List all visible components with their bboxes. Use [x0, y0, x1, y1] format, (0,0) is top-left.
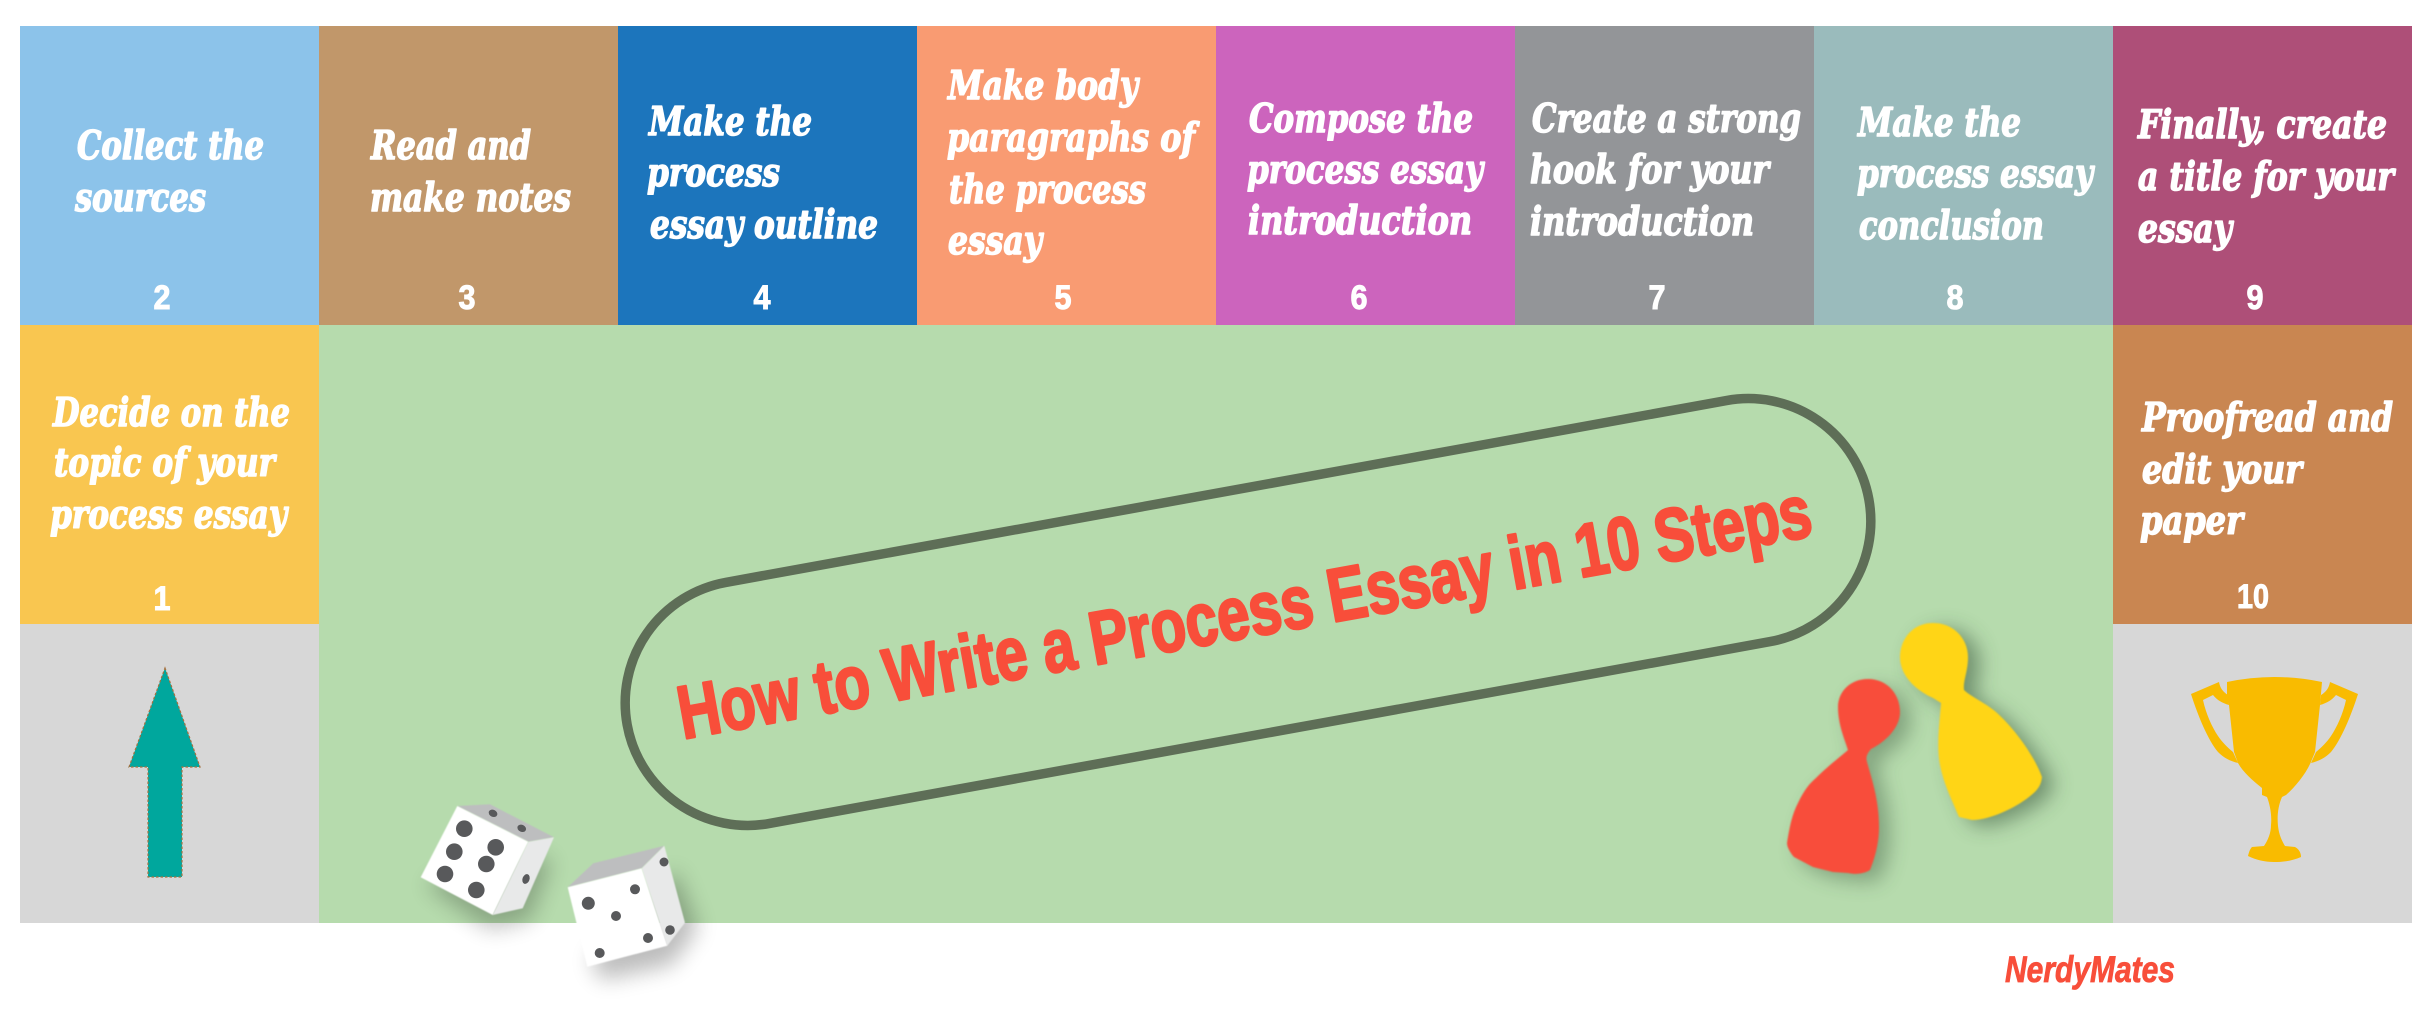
text: step 8: [1856, 100, 2095, 249]
text: step 6: introduction: [1248, 198, 1472, 244]
panel: step 8: [1814, 26, 2113, 325]
text: step 3: make notes: [370, 175, 571, 221]
panel: step 2: [20, 26, 319, 325]
text: step 2: sources: [74, 175, 206, 221]
number 6: 6: [1350, 279, 1368, 317]
title pill: [605, 379, 1891, 845]
text: step 8: Make the: [1856, 100, 2021, 146]
icon: red game pawn: [1787, 679, 1911, 882]
text: step 10: edit your: [2142, 447, 2304, 493]
text: step 4: essay outline: [650, 202, 878, 248]
number 3: 3: [458, 279, 476, 317]
panel: step 10: [2113, 325, 2412, 624]
number 10: 10: [2237, 578, 2269, 616]
panel: step 6: [1216, 26, 1515, 325]
text: step 10: [2140, 395, 2393, 544]
panel: green board centre: [319, 325, 2113, 923]
text: step 4: [647, 99, 878, 248]
text: step 2: [74, 123, 264, 221]
text: step 5: Make body: [946, 63, 1140, 109]
text: step 7: Create a strong: [1532, 96, 1801, 142]
text: step 5: the process: [949, 167, 1146, 213]
text: step 5: paragraphs of: [947, 115, 1200, 161]
text: step 4: process: [647, 150, 780, 196]
text: step 8: process essay: [1857, 151, 2095, 197]
text: step 6: [1247, 96, 1485, 244]
number 8: 8: [1946, 279, 1964, 317]
text: step 6: Compose the: [1249, 96, 1473, 142]
text: step 3: Read and: [370, 123, 531, 169]
text: step 4: Make the: [647, 99, 812, 145]
panel: start square with arrow: [20, 624, 319, 923]
text: step 1: [50, 390, 290, 538]
number 1: 1: [154, 580, 170, 618]
icon: dice with five face: [568, 846, 698, 980]
text: step 2: Collect the: [77, 123, 264, 169]
text: step 10: paper: [2140, 498, 2245, 544]
icon: up arrow: [129, 668, 200, 877]
number 5: 5: [1054, 279, 1072, 317]
text: step 7: introduction: [1530, 199, 1754, 245]
text: step 1: process essay: [50, 492, 289, 538]
text: step 5: [946, 63, 1200, 264]
text: step 3: [370, 123, 571, 221]
text: step 5: essay: [948, 218, 1044, 264]
icon: dice with six face: [421, 804, 554, 930]
number 4: 4: [754, 279, 771, 317]
brand: NerdyMates: NerdyMates: [2005, 949, 2175, 990]
icon: yellow game pawn: [1900, 623, 2054, 826]
panel: step 1: [20, 325, 319, 624]
text: step 6: process essay: [1247, 147, 1485, 193]
icon: trophy: [2191, 677, 2358, 862]
panel: step 5: [917, 26, 1216, 325]
panel: step 9: [2113, 26, 2412, 325]
text: step 1: topic of your: [54, 440, 277, 486]
panel: finish square with trophy: [2113, 624, 2412, 923]
number 9: 9: [2246, 279, 2264, 317]
text: step 7: hook for your: [1530, 147, 1771, 193]
panel: step 4: [618, 26, 917, 325]
text: step 7: [1530, 96, 1801, 245]
panel: step 3: [319, 26, 618, 325]
number 7: 7: [1648, 279, 1666, 317]
text: step 9: essay: [2138, 206, 2234, 252]
text: step 1: Decide on the: [52, 390, 290, 436]
text: step 9: [2137, 102, 2396, 252]
panel: step 7: [1515, 26, 1814, 325]
number 2: 2: [154, 279, 170, 317]
text: step 8: conclusion: [1859, 203, 2044, 249]
title: How to Write a Process Essay in 10 Steps: [671, 468, 1818, 755]
